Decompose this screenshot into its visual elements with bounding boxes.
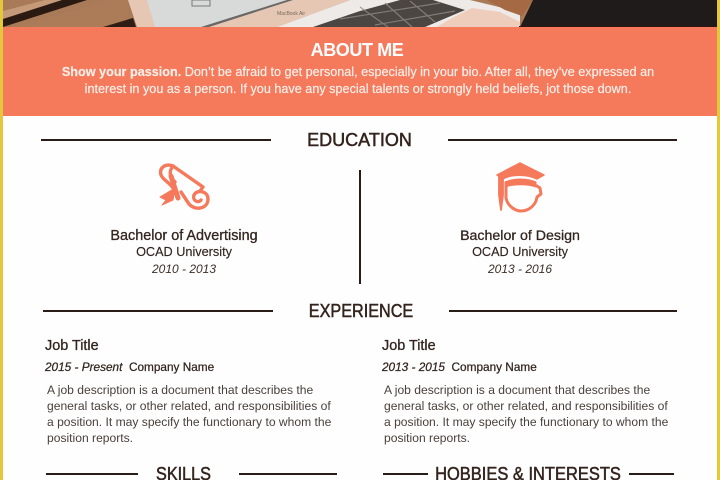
- header photo: laptop on wooden desk: MacBook Air: [277, 11, 305, 17]
- job description: A job description is a document that describes the: [47, 383, 313, 397]
- university: OCAD University: [136, 245, 232, 259]
- section: education heading: EDUCATION: [307, 130, 412, 150]
- job title: Job Title: [382, 338, 436, 354]
- vertical divider: [359, 170, 361, 284]
- icon: diploma scroll: [158, 163, 210, 210]
- job description: position reports.: [47, 431, 133, 445]
- date and company: 2015 - Present Company Name: [45, 360, 214, 374]
- panel: about me: [3, 27, 717, 116]
- header photo: laptop on wooden desk: [3, 0, 717, 27]
- about me heading: ABOUT ME: [311, 40, 403, 60]
- job description: position reports.: [384, 431, 470, 445]
- job description: a position. It may specify the functionary to whom the: [47, 415, 331, 429]
- left yellow border: [0, 0, 3, 480]
- job description: a position. It may specify the functionary to whom the: [384, 415, 668, 429]
- about me text: [62, 64, 654, 96]
- job description: A job description is a document that describes the: [384, 383, 650, 397]
- education right text: [460, 228, 580, 276]
- section: experience heading: EXPERIENCE: [309, 301, 413, 321]
- education left text: [110, 228, 258, 276]
- right yellow border: [717, 0, 720, 480]
- about me text: interest in you as a person. If you have any special talents or strongly held beliefs, jot those down.: [85, 82, 631, 96]
- job title: Job Title: [45, 338, 99, 354]
- dates: 2013 - 2016: [488, 262, 552, 276]
- job description: general tasks, or other related, and responsibilities of: [384, 399, 668, 413]
- date and company: 2013 - 2015 Company Name: [382, 360, 537, 374]
- job description: [384, 383, 668, 445]
- degree: Bachelor of Advertising: [110, 228, 258, 244]
- experience left: [44, 338, 331, 445]
- job description: [47, 383, 331, 445]
- dates: 2010 - 2013: [152, 262, 216, 276]
- experience right: [382, 338, 668, 445]
- icon: graduate with cap: [496, 162, 545, 212]
- about me text: Show your passion. Don’t be afraid to get personal, especially in your bio. After all, they’ve expressed an: [62, 64, 654, 78]
- job description: general tasks, or other related, and responsibilities of: [47, 399, 331, 413]
- degree: Bachelor of Design: [460, 228, 580, 244]
- university: OCAD University: [472, 245, 568, 259]
